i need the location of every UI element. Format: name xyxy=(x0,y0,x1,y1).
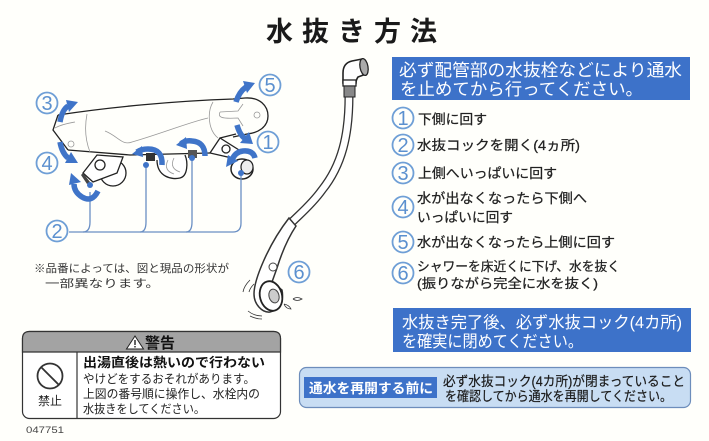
step 2: 2 xyxy=(397,135,409,157)
step 4: 4 xyxy=(397,197,409,219)
center valves xyxy=(146,138,239,179)
panel: warning xyxy=(22,332,280,418)
step 1 xyxy=(392,108,487,130)
step 4: いっぱいに回す xyxy=(417,210,513,225)
banner: stop water first xyxy=(392,57,690,100)
note about product shape: 一部異なります。 xyxy=(45,277,160,290)
step number 6 xyxy=(288,262,310,284)
instruction text: 必ず水抜コック(4カ所)が閉まっていること xyxy=(443,374,685,389)
step 3 xyxy=(392,162,557,185)
shower handle xyxy=(254,218,296,312)
step 2 xyxy=(392,134,580,157)
banner: close the drain cocks: 水抜き完了後、必ず水抜コック(4カ所) xyxy=(402,313,682,332)
hose inner xyxy=(292,96,349,222)
instruction text xyxy=(443,374,685,404)
right valve xyxy=(231,159,253,179)
warning text: 水抜きをしてください。 xyxy=(83,402,205,416)
prohibition icon xyxy=(38,364,62,408)
hose xyxy=(292,96,349,222)
step 1: 1 xyxy=(397,108,409,130)
step numbers on faucet: 2 xyxy=(51,221,63,243)
step numbers on faucet: 1 xyxy=(262,132,274,154)
warning header xyxy=(22,332,280,352)
warning text: 出湯直後は熱いので行わない xyxy=(83,355,265,370)
banner: close the drain cocks xyxy=(393,308,691,352)
step 6: シャワーを床近くに下げ、水を抜く xyxy=(417,259,620,274)
step 1: 下側に回す xyxy=(418,112,487,127)
step 5: 5 xyxy=(397,232,409,254)
instruction text: を確認してから通水を再開してください。 xyxy=(445,389,672,404)
step number 6: 6 xyxy=(293,262,305,284)
step 5 xyxy=(392,232,615,254)
part number: 047751 xyxy=(26,425,64,436)
warning text: やけどをするおそれがあります。 xyxy=(83,371,255,386)
warning text: 上図の番号順に操作し、水栓内の xyxy=(83,386,260,401)
banner: close the drain cocks: を確実に閉めてください。 xyxy=(402,332,583,351)
step numbers on faucet: 4 xyxy=(41,153,53,175)
warning header: 警告 xyxy=(145,334,175,352)
step numbers on faucet: 3 xyxy=(41,93,53,115)
shower head xyxy=(243,263,302,319)
title: 水抜き方法 xyxy=(266,17,437,47)
prohibition icon: 禁止 xyxy=(38,394,62,408)
step 4: 水が出なくなったら下側へ xyxy=(417,191,587,206)
left valve xyxy=(81,155,126,186)
label: before resuming: 通水を再開する前に xyxy=(309,380,433,396)
faucet diagram xyxy=(36,74,280,243)
warning text xyxy=(83,355,265,416)
step 6: 6 xyxy=(397,263,409,285)
shower hose illustration xyxy=(243,58,369,319)
step 3: 上側へいっぱいに回す xyxy=(418,166,557,181)
note about product shape xyxy=(34,261,229,290)
panel: before resuming water xyxy=(300,368,690,408)
rotation arrows xyxy=(60,81,255,199)
banner: stop water first: 必ず配管部の水抜栓などにより通水 xyxy=(399,61,682,80)
banner: stop water first: を止めてから行ってください。 xyxy=(400,80,643,99)
step 5: 水が出なくなったら上側に回す xyxy=(417,235,615,250)
step 3: 3 xyxy=(397,163,409,185)
step 6: (振りながら完全に水を抜く) xyxy=(417,276,598,291)
note about product shape: ※品番によっては、図と現品の形状が xyxy=(34,261,229,275)
step 4 xyxy=(392,191,587,225)
step 6 xyxy=(392,259,620,291)
elbow fitting xyxy=(343,58,369,97)
label: before resuming xyxy=(304,377,437,398)
step numbers on faucet xyxy=(36,74,280,243)
step numbers on faucet: 5 xyxy=(264,75,276,97)
drain cock leader lines xyxy=(69,155,244,232)
faucet body xyxy=(53,98,268,155)
step list xyxy=(392,108,620,291)
step 2: 水抜コックを開く(4ヵ所) xyxy=(417,138,580,153)
